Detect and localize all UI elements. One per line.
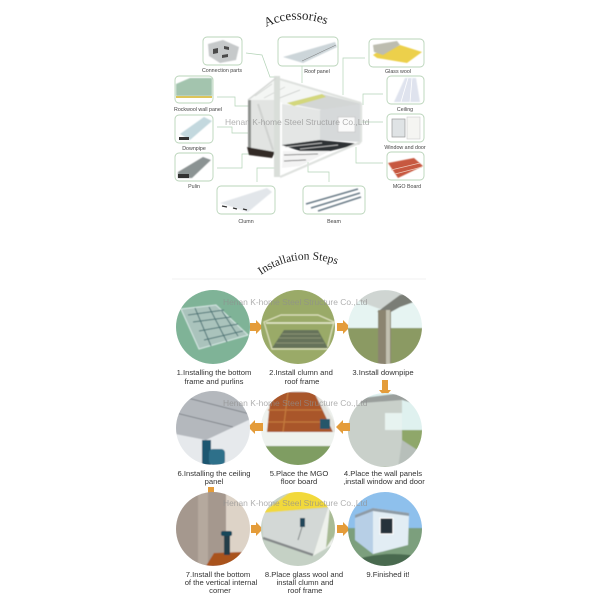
step 5: 5.Place the MGO — [270, 469, 328, 478]
arrow: down to step 7 — [205, 487, 217, 500]
step 7: of the vertical internal — [185, 578, 258, 587]
panel: ceiling — [387, 76, 424, 113]
step 3: 3.Install downpipe — [352, 368, 414, 377]
watermark: Henan K-home Steel Structure Co.,Ltd — [225, 117, 370, 127]
watermark row 1: Henan K-home Steel Structure Co.,Ltd — [223, 297, 368, 307]
container frame illustration — [247, 76, 362, 177]
panel: pulin: Pulin — [188, 184, 200, 190]
panel: glass wool — [369, 39, 424, 75]
step 6: 6.Installing the ceiling — [177, 469, 251, 478]
step 4 — [343, 392, 425, 486]
arrow — [337, 320, 350, 334]
panel: roof panel: Roof panel — [304, 69, 330, 75]
step 6 — [176, 391, 250, 486]
panel: MGO board — [387, 152, 424, 190]
panel: beam: Beam — [327, 219, 342, 225]
step 5: floor board — [281, 477, 317, 486]
panel: downpipe — [175, 115, 213, 152]
arrow: down to step 4 — [379, 380, 391, 397]
step 7 — [176, 492, 257, 593]
step 8: 8.Place glass wool and — [265, 570, 343, 579]
step 1: 1.Installing the bottom — [177, 368, 251, 377]
step 7: 7.Install the bottom — [186, 570, 250, 579]
step 2 — [261, 290, 335, 384]
arrow — [250, 320, 263, 334]
step 1 — [176, 290, 251, 386]
step 3 — [348, 290, 422, 376]
panel: downpipe: Downpipe — [182, 146, 206, 152]
step 5 — [261, 391, 335, 484]
step 4: 4.Place the wall panels — [344, 469, 422, 478]
arrow — [336, 420, 350, 434]
step 8: roof frame — [288, 586, 322, 595]
arrow — [251, 522, 263, 536]
panel: clumn: Clumn — [238, 219, 254, 225]
step 9: 9.Finished it! — [366, 570, 410, 579]
step 8: install clumn and — [277, 578, 333, 587]
connector lines — [217, 53, 383, 182]
panel: beam — [303, 186, 365, 225]
step 2: 2.Install clumn and — [269, 368, 333, 377]
panel: roof panel — [278, 37, 338, 75]
panel: window and door — [384, 114, 426, 151]
step 9 — [348, 492, 422, 577]
arrow — [337, 522, 350, 536]
step 1: frame and purlins — [184, 377, 244, 386]
watermark row 3: Henan K-home Steel Structure Co.,Ltd — [223, 498, 368, 508]
panel: clumn — [217, 186, 275, 225]
panel: rockwool wall panel: Rockwool wall panel — [174, 107, 222, 113]
panel: window and door: Window and door — [384, 145, 426, 151]
title: Accessories: Accessories — [266, 12, 328, 27]
panel: glass wool: Glass wool — [385, 69, 411, 75]
panel: rockwool wall panel — [174, 76, 222, 113]
step 2: roof frame — [285, 377, 319, 386]
panel: connection parts: Connection parts — [202, 68, 242, 74]
step 8 — [260, 490, 343, 595]
watermark row 2: Henan K-home Steel Structure Co.,Ltd — [223, 398, 368, 408]
panel: MGO board: MGO Board — [393, 184, 421, 190]
panel: connection parts — [202, 37, 242, 74]
arrow — [248, 420, 263, 434]
panel: ceiling: Ceiling — [397, 107, 413, 113]
title: Installation Steps: Installation Steps — [257, 252, 338, 275]
step 4: ,install window and door — [343, 477, 425, 486]
step 7: corner — [209, 586, 231, 595]
panel: pulin — [175, 153, 213, 190]
diagram: accessories exploded view — [174, 37, 426, 225]
step 6: panel — [205, 477, 224, 486]
